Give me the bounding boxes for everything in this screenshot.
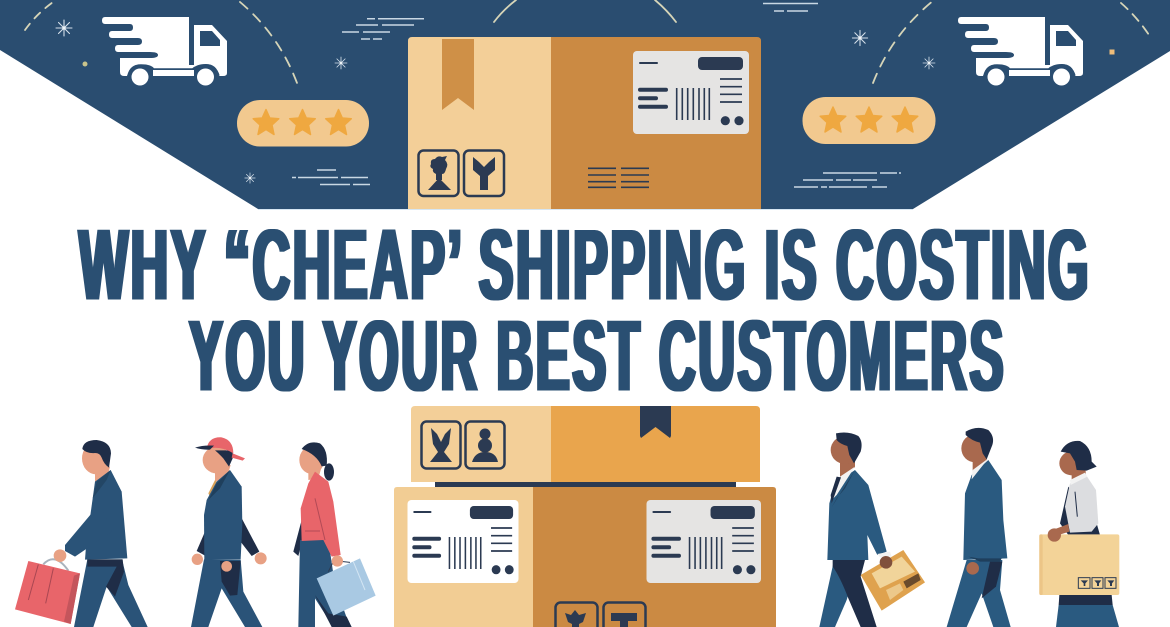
rating pill left	[237, 100, 369, 146]
top	[1065, 476, 1098, 533]
face	[1072, 462, 1086, 480]
shipping label	[633, 51, 749, 134]
face	[973, 452, 987, 472]
parcel	[861, 550, 925, 611]
rating pill right	[802, 97, 936, 144]
face	[840, 455, 855, 477]
person: man with red bag	[15, 440, 148, 627]
blue bag	[328, 562, 350, 572]
fragile icons	[418, 150, 504, 196]
person: man with red cap	[191, 437, 267, 627]
title	[79, 210, 1091, 412]
jacket	[827, 470, 887, 560]
legs	[298, 540, 350, 627]
speed lines decoration	[292, 4, 901, 187]
box ribbon	[442, 39, 474, 110]
large box	[1039, 534, 1119, 595]
red top	[301, 472, 341, 557]
box text lines	[588, 168, 649, 187]
decorative dashed arcs	[25, 0, 1149, 83]
jacket	[963, 460, 1007, 560]
person: woman in red top with blue bag	[293, 442, 376, 627]
jacket	[85, 470, 127, 560]
sparkles	[56, 20, 1114, 183]
jacket	[204, 470, 242, 560]
top shipping box	[408, 37, 761, 209]
stacked boxes	[394, 406, 776, 627]
legs	[191, 559, 262, 627]
icon: delivery truck left	[102, 17, 227, 86]
icon: delivery truck right	[958, 17, 1083, 86]
face	[215, 465, 231, 482]
legs	[947, 560, 1011, 627]
person: woman carrying large box	[1039, 441, 1119, 627]
upper stacked box	[411, 406, 760, 482]
background banner	[0, 0, 1170, 209]
cap	[207, 437, 233, 453]
face	[95, 467, 110, 482]
person: man carrying parcel	[819, 432, 925, 627]
lower stacked box	[394, 487, 776, 627]
red bag	[43, 559, 68, 571]
face	[308, 467, 322, 480]
person: man in blue suit	[947, 428, 1011, 627]
legs	[74, 559, 148, 627]
